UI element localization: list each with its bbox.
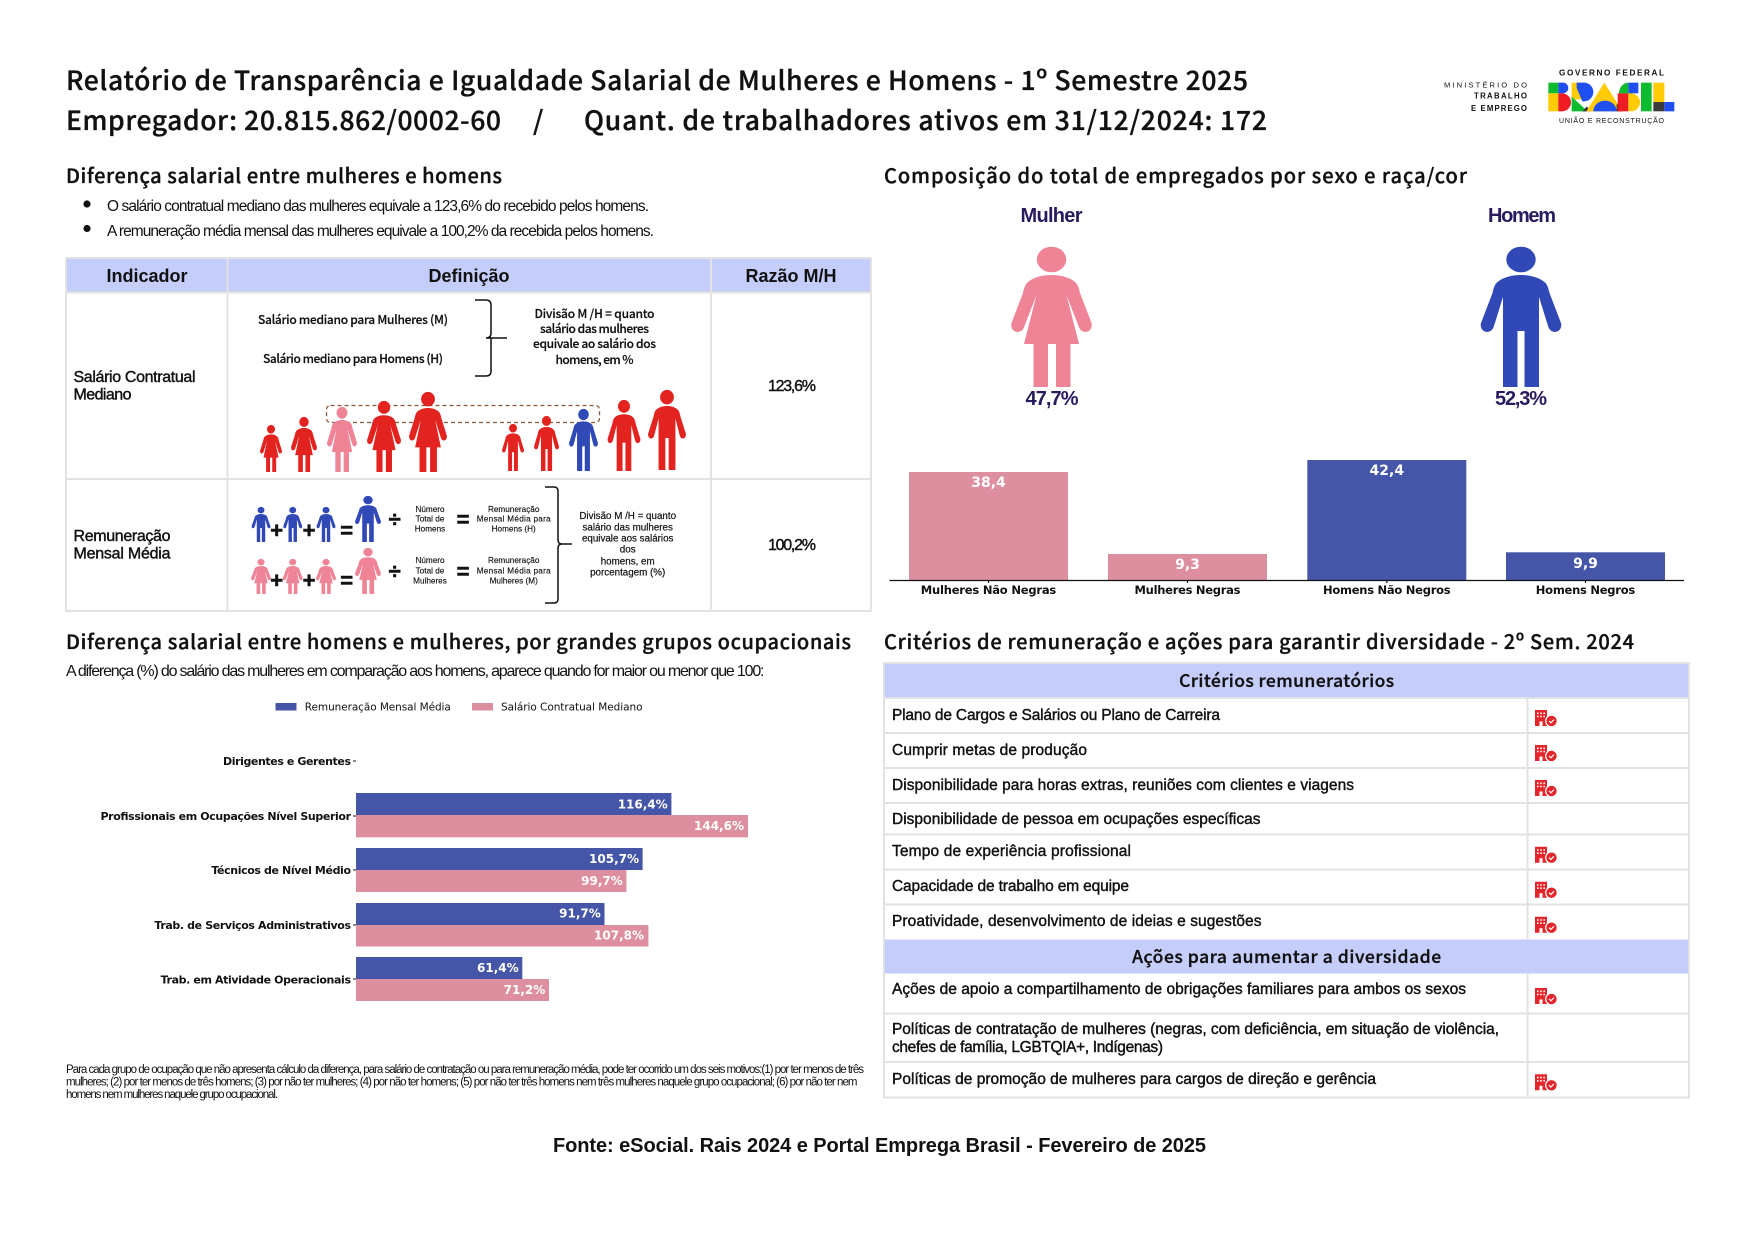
- table header: Razão M/H: [745, 266, 837, 286]
- logo: governo federal brasil: UNIÃO E RECONSTRUÇÃO: [1559, 116, 1665, 125]
- brace and division note: porcentagem (%): [590, 567, 665, 578]
- logo: ministério do trabalho e emprego: E EMPREGO: [1471, 104, 1527, 113]
- brace and division note: [545, 487, 677, 603]
- women mean formula: +: [270, 568, 283, 593]
- bullet list: A remuneração média mensal das mulheres equivale a 100,2% da recebida pelos homens.: [107, 223, 654, 240]
- y axis labels: Trab. de Serviços Administrativos: [154, 919, 351, 932]
- pictogram: homem: Homem: [1488, 205, 1556, 227]
- criteria list: [892, 707, 1499, 1088]
- men mean formula: +: [270, 518, 283, 543]
- men mean formula: ÷: [389, 507, 401, 532]
- panel: criteria table: [884, 663, 1689, 1098]
- pictogram: homem: 52,3%: [1495, 388, 1547, 410]
- bar chart: grupos ocupacionais: 105,7%: [589, 852, 639, 866]
- men mean formula: +: [303, 518, 315, 543]
- criteria list: Políticas de contratação de mulheres (negras, com deficiência, em situação de violência,: [892, 1021, 1499, 1038]
- median pictogram row: [260, 390, 686, 472]
- row label: remuneração mensal média: Mensal Média: [74, 546, 171, 562]
- bar chart: grupos ocupacionais: 71,2%: [504, 983, 545, 997]
- row label: salário contratual mediano: [74, 369, 196, 404]
- women mean formula: =: [457, 559, 469, 584]
- table header: Indicador: [106, 266, 188, 286]
- criteria list: Disponibilidade de pessoa em ocupações específicas: [892, 811, 1261, 828]
- bar chart: composição por raça/cor: Homens Negros: [1536, 583, 1635, 597]
- logo: ministério do trabalho e emprego: [1444, 81, 1527, 113]
- men mean formula: Mensal Média para: [477, 515, 551, 524]
- brace and division note: equivale aos salários: [582, 534, 674, 545]
- bar chart: composição por raça/cor: 42,4: [1370, 463, 1404, 479]
- men mean formula: Homens: [415, 525, 445, 534]
- panel: indicator table: [66, 258, 871, 611]
- brace and division note: Divisão M /H = quanto: [579, 511, 677, 522]
- title: Empregador: 20.815.862/0002-60: [66, 99, 501, 138]
- criteria list: Plano de Cargos e Salários ou Plano de Carreira: [892, 707, 1220, 724]
- table header: [66, 258, 871, 292]
- bar chart: grupos ocupacionais: 116,4%: [618, 798, 668, 812]
- women mean formula: =: [340, 568, 353, 593]
- footnote: homens nem mulheres naquele grupo ocupacional.: [66, 1089, 278, 1101]
- source line: Fonte: eSocial. Rais 2024 e Portal Emprega Brasil - Fevereiro de 2025: [553, 1135, 1206, 1157]
- men mean formula: Remuneração: [488, 505, 540, 514]
- women mean formula: Mensal Média para: [477, 567, 551, 576]
- women mean formula: Total de: [416, 567, 445, 576]
- bar chart: composição por raça/cor: [890, 460, 1684, 597]
- ratio 123,6%: 123,6%: [768, 378, 816, 395]
- logo: ministério do trabalho e emprego: MINISTÉRIO DO: [1444, 81, 1527, 90]
- definition: salário mediano: salário das mulheres: [540, 320, 649, 337]
- bar chart: composição por raça/cor: 9,9: [1573, 556, 1598, 572]
- heading: grupos ocupacionais: Diferença salarial entre homens e mulheres, por grandes grupos ocupacionais: [66, 626, 851, 655]
- men mean formula: [252, 496, 551, 543]
- women mean formula: Remuneração: [488, 556, 540, 565]
- table grid: [66, 258, 871, 611]
- heading: composição: Composição do total de empregados por sexo e raça/cor: [884, 160, 1468, 189]
- ratio 100,2%: 100,2%: [768, 537, 816, 554]
- logo: ministério do trabalho e emprego: TRABALHO: [1474, 92, 1527, 101]
- pictogram: mulher: 47,7%: [1026, 388, 1079, 410]
- bar chart: composição por raça/cor: 9,3: [1175, 557, 1200, 573]
- title: Relatório de Transparência e Igualdade Salarial de Mulheres e Homens - 1º Semestre 2025: [66, 59, 1248, 98]
- pictogram: mulher: [1011, 205, 1092, 410]
- brace and division note: homens, em: [601, 556, 655, 567]
- legend: Salário Contratual Mediano: [501, 702, 642, 714]
- footnote: mulheres; (2) por ter menos de três homens; (3) por não ter mulheres; (4) por não ter homens; (5) por não ter três homens nem três mulheres naquele grupo ocupacional; (6) por não ter nem: [66, 1076, 857, 1088]
- logo: governo federal brasil: [1548, 69, 1674, 125]
- pictogram: mulher: Mulher: [1020, 205, 1083, 227]
- bar chart: grupos ocupacionais: 61,4%: [477, 961, 519, 975]
- legend: Remuneração Mensal Média: [305, 702, 451, 714]
- men mean formula: Homens (H): [492, 525, 536, 534]
- bar chart: grupos ocupacionais: 91,7%: [559, 906, 601, 920]
- y axis labels: [100, 755, 352, 986]
- footnote: Para cada grupo de ocupação que não apresenta cálculo da diferença, para salário de contratação ou para remuneração média, pode ter ocorrido um dos seis motivos:(1) por ter menos de três: [66, 1064, 864, 1076]
- heading: critérios: Critérios de remuneração e ações para garantir diversidade - 2º Sem. 2024: [884, 626, 1634, 655]
- bar chart: composição por raça/cor: Mulheres Não Negras: [921, 583, 1056, 597]
- men mean formula: =: [340, 518, 353, 543]
- criteria list: Capacidade de trabalho em equipe: [892, 878, 1129, 895]
- definition: salário mediano: Salário mediano para Mulheres (M): [258, 311, 448, 328]
- definition: salário mediano: homens, em %: [556, 351, 634, 368]
- row label: remuneração mensal média: [74, 528, 171, 562]
- row label: salário contratual mediano: Mediano: [74, 386, 132, 404]
- criteria list: Tempo de experiência profissional: [892, 843, 1131, 860]
- bar chart: composição por raça/cor: Homens Não Negros: [1323, 583, 1451, 597]
- row label: remuneração mensal média: Remuneração: [74, 528, 171, 545]
- bullet list: [83, 198, 654, 240]
- title: /: [533, 99, 543, 138]
- criteria list: Proatividade, desenvolvimento de ideias e sugestões: [892, 913, 1262, 930]
- definition: salário mediano: Divisão M /H = quanto: [534, 305, 654, 322]
- logo: governo federal brasil: GOVERNO FEDERAL: [1559, 69, 1664, 78]
- brace and division note: salário das mulheres: [582, 523, 673, 534]
- criteria list: Cumprir metas de produção: [892, 742, 1087, 759]
- bar chart: grupos ocupacionais: 144,6%: [694, 819, 744, 833]
- definition: salário mediano: equivale ao salário dos: [533, 335, 656, 352]
- header: ações para aumentar a diversidade: Ações para aumentar a diversidade: [1132, 944, 1441, 969]
- row label: salário contratual mediano: Salário Contratual: [74, 369, 196, 386]
- criteria list: Ações de apoio a compartilhamento de obrigações familiares para ambos os sexos: [892, 981, 1466, 998]
- legend: [276, 702, 642, 714]
- women mean formula: ÷: [389, 559, 401, 584]
- pictogram: homem: [1481, 205, 1561, 410]
- table grid: [884, 663, 1689, 1098]
- y axis labels: Técnicos de Nível Médio: [211, 864, 351, 877]
- bar chart: grupos ocupacionais: 107,8%: [594, 928, 644, 942]
- criteria list: Políticas de promoção de mulheres para cargos de direção e gerência: [892, 1071, 1376, 1088]
- icons: company check: [1535, 710, 1558, 1092]
- women mean formula: Mulheres: [413, 577, 447, 586]
- brace and division note: dos: [620, 545, 636, 556]
- title: [66, 59, 1267, 138]
- criteria list: Disponibilidade para horas extras, reuniões com clientes e viagens: [892, 777, 1354, 794]
- heading: diferença salarial: Diferença salarial entre mulheres e homens: [66, 160, 502, 189]
- women mean formula: Número: [415, 556, 445, 565]
- bar chart: composição por raça/cor: Mulheres Negras: [1134, 583, 1241, 597]
- women mean formula: Mulheres (M): [490, 577, 538, 586]
- definition: salário mediano: Salário mediano para Homens (H): [263, 350, 443, 367]
- men mean formula: Total de: [416, 515, 445, 524]
- bar chart: grupos ocupacionais: 99,7%: [581, 874, 623, 888]
- y axis labels: Dirigentes e Gerentes: [223, 755, 351, 768]
- men mean formula: Número: [415, 505, 445, 514]
- bar chart: composição por raça/cor: 38,4: [971, 475, 1006, 491]
- header: ações para aumentar a diversidade: [884, 940, 1689, 974]
- header: critérios remuneratórios: [884, 663, 1689, 698]
- bar chart: grupos ocupacionais: [100, 755, 748, 1001]
- table header: Definição: [428, 266, 510, 286]
- header: critérios remuneratórios: Critérios remuneratórios: [1179, 668, 1394, 693]
- women mean formula: [251, 548, 551, 594]
- criteria list: chefes de família, LGBTQIA+, Indígenas): [892, 1039, 1163, 1056]
- y axis labels: Trab. em Atividade Operacionais: [161, 974, 351, 986]
- men mean formula: =: [457, 507, 469, 532]
- bullet list: O salário contratual mediano das mulheres equivale a 123,6% do recebido pelos homens.: [107, 198, 649, 215]
- chart intro text: A diferença (%) do salário das mulheres em comparação aos homens, aparece quando for maior ou menor que 100:: [66, 663, 764, 680]
- footnote: [66, 1064, 864, 1101]
- y axis labels: Profissionais em Ocupações Nível Superior: [100, 810, 352, 823]
- title: Quant. de trabalhadores ativos em 31/12/2024: 172: [584, 99, 1267, 138]
- definition: salário mediano: [258, 300, 656, 376]
- women mean formula: +: [303, 568, 315, 593]
